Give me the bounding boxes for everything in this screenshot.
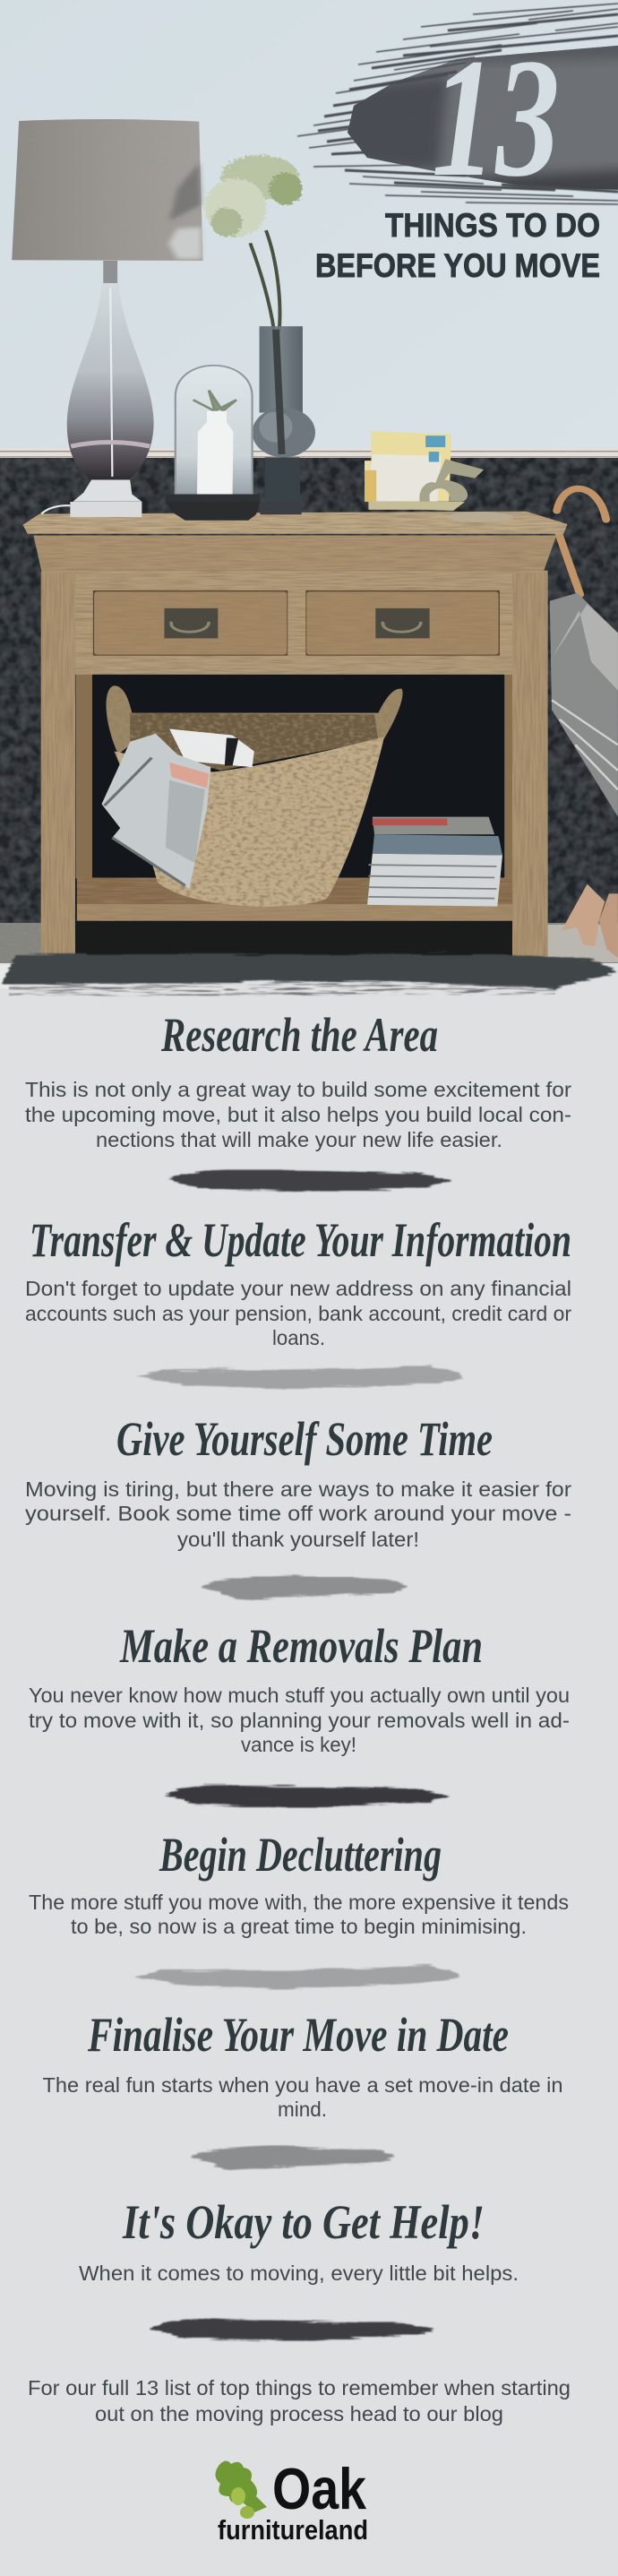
white vase bbox=[197, 411, 233, 495]
drawer handle bbox=[164, 608, 218, 638]
body text: accounts such as your pension, bank account, credit card or bbox=[25, 1302, 571, 1325]
dado rail bbox=[0, 448, 618, 459]
cloche base bbox=[166, 502, 260, 521]
hero photo: console table scene bbox=[0, 0, 618, 963]
body text: Moving is tiring, but there are ways to make it easier for bbox=[25, 1478, 571, 1501]
brush divider 7 bbox=[150, 2319, 433, 2341]
wordmark furnitureland: furnitureland bbox=[218, 2514, 368, 2546]
moulding bbox=[33, 535, 556, 571]
brush divider 6 bbox=[191, 2146, 396, 2170]
lamp neck bbox=[103, 261, 117, 283]
brush divider 4 bbox=[165, 1785, 450, 1808]
body text: to be, so now is a great time to begin minimising. bbox=[71, 1915, 527, 1938]
body text: Don't forget to update your new address on any financial bbox=[25, 1277, 571, 1300]
section 3: give yourself some time bbox=[25, 1412, 571, 1551]
heading: It's Okay to Get Help! bbox=[122, 2195, 485, 2249]
heading: Give Yourself Some Time bbox=[116, 1412, 493, 1466]
right leg bbox=[512, 573, 548, 958]
umbrella bbox=[550, 488, 618, 817]
glass vase bbox=[253, 326, 315, 502]
body text bbox=[25, 1078, 571, 1151]
glass cloche bbox=[166, 366, 260, 502]
body text bbox=[29, 1891, 569, 1938]
closing text: out on the moving process head to our blog bbox=[95, 2402, 503, 2425]
section 5: begin decluttering bbox=[29, 1828, 569, 1938]
body text: You never know how much stuff you actually own until you bbox=[29, 1684, 570, 1707]
body text: loans. bbox=[272, 1326, 325, 1349]
heading: Make a Removals Plan bbox=[119, 1619, 483, 1673]
flowers bbox=[205, 155, 302, 237]
body text bbox=[43, 2073, 562, 2121]
number five ornament bbox=[419, 459, 484, 502]
closing text: For our full 13 list of top things to remember when starting bbox=[28, 2376, 571, 2399]
floor bbox=[0, 923, 618, 963]
basket bbox=[107, 685, 402, 907]
body text bbox=[25, 1277, 571, 1349]
heading: Begin Decluttering bbox=[159, 1828, 442, 1882]
glass lamp base bbox=[67, 283, 154, 480]
left drawer bbox=[93, 590, 288, 656]
closing text bbox=[28, 2376, 571, 2425]
body text bbox=[29, 1684, 570, 1756]
table interior bbox=[75, 674, 512, 921]
header brush stroke bbox=[297, 4, 618, 204]
title bbox=[315, 207, 600, 284]
table top bbox=[23, 512, 568, 534]
section 2: transfer and update bbox=[25, 1213, 571, 1349]
towel bbox=[102, 728, 254, 889]
body text: The more stuff you move with, the more expensive it tends bbox=[29, 1891, 569, 1914]
body text: yourself. Book some time off work around your move - bbox=[25, 1502, 571, 1525]
section 1: research the area bbox=[25, 1008, 571, 1151]
lamp foot bbox=[70, 502, 142, 517]
shelf bbox=[77, 877, 512, 921]
brush divider 5 bbox=[134, 1965, 460, 1989]
body text: the upcoming move, but it also helps you build local con- bbox=[25, 1103, 571, 1126]
big numeral 13: 13 bbox=[432, 24, 560, 212]
body text: This is not only a great way to build some excitement for bbox=[25, 1078, 571, 1101]
wordmark Oak: Oak bbox=[272, 2456, 367, 2521]
vase foot bbox=[260, 502, 302, 514]
lamp stand bbox=[73, 480, 142, 502]
brush divider 1 bbox=[167, 1170, 451, 1192]
section 6: finalise your move in date bbox=[43, 2008, 562, 2121]
postcards bbox=[365, 431, 451, 502]
heading: Research the Area bbox=[160, 1008, 438, 1062]
icon: oak leaf and acorns bbox=[215, 2460, 267, 2519]
flower stems bbox=[250, 230, 279, 332]
lamp cable bbox=[41, 505, 70, 514]
console table bbox=[23, 488, 618, 958]
magazines bbox=[367, 817, 502, 907]
body text: vance is key! bbox=[241, 1733, 356, 1756]
shoes bbox=[562, 884, 618, 958]
body text: you'll thank yourself later! bbox=[177, 1528, 419, 1551]
right drawer bbox=[305, 590, 500, 656]
left leg bbox=[41, 573, 75, 954]
lamp and ornaments on table bbox=[12, 119, 484, 502]
section 4: make a removals plan bbox=[29, 1619, 570, 1756]
body text: mind. bbox=[278, 2098, 327, 2121]
brush body bbox=[348, 45, 618, 190]
shadow under table bbox=[75, 921, 512, 959]
title: THINGS TO DO bbox=[385, 207, 600, 244]
body text: try to move with it, so planning your removals well in ad- bbox=[29, 1709, 570, 1732]
logo: oak furnitureland bbox=[215, 2456, 368, 2546]
brush divider 3 bbox=[201, 1575, 408, 1599]
brush divider 2 bbox=[136, 1366, 463, 1390]
section 7: it's okay to get help bbox=[79, 2195, 519, 2285]
table lamp bbox=[12, 119, 203, 502]
card and five ornament bottom bbox=[368, 502, 465, 511]
body text: When it comes to moving, every little bit helps. bbox=[79, 2262, 519, 2285]
body text: nections that will make your new life easier. bbox=[96, 1128, 502, 1151]
back legs bbox=[75, 674, 514, 879]
body text: The real fun starts when you have a set move-in date in bbox=[43, 2073, 562, 2097]
body text bbox=[25, 1478, 571, 1551]
brush bristle streaks bbox=[297, 4, 618, 204]
dark panelled wall bbox=[0, 458, 618, 926]
lamp shade bbox=[12, 119, 203, 261]
table frieze and rail bbox=[41, 571, 548, 675]
bottom photo brush edge bbox=[0, 954, 618, 996]
tray on table bbox=[446, 512, 514, 522]
wall bbox=[0, 0, 618, 451]
drawer handle bbox=[375, 608, 430, 638]
